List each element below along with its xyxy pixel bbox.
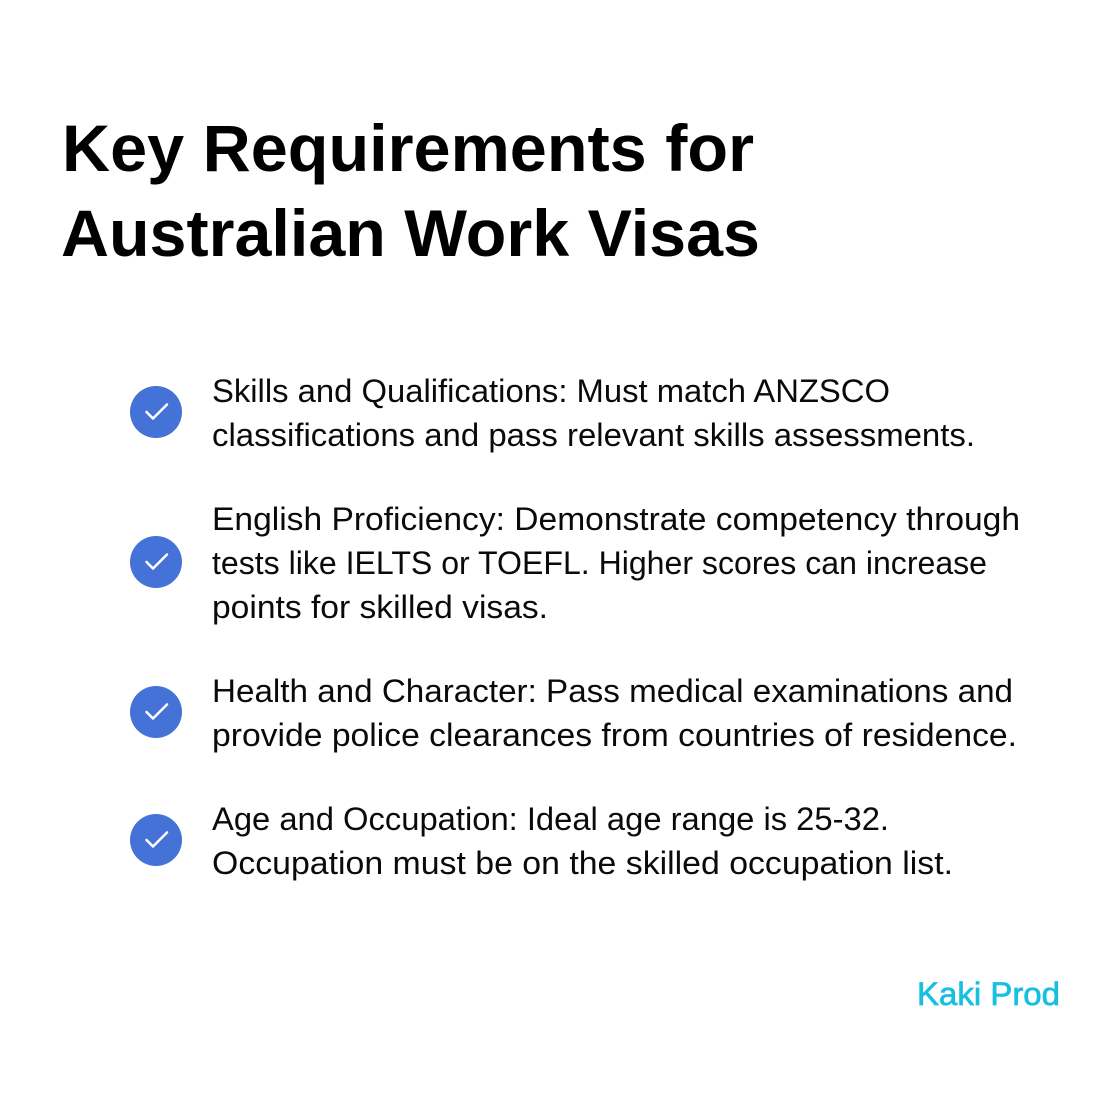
icon: check badge bbox=[130, 686, 182, 738]
title bbox=[61, 111, 760, 270]
icon: check badge bbox=[130, 386, 182, 438]
icon: check badge bbox=[130, 536, 182, 588]
requirement: age and occupation bbox=[130, 801, 953, 881]
text: english proficiency: English Proficiency: Demonstrate competency through bbox=[212, 501, 1020, 537]
requirement: health and character bbox=[130, 673, 1017, 753]
text: skills and qualifications: Skills and Qualifications: Must match ANZSCO bbox=[212, 373, 890, 409]
requirement: skills and qualifications bbox=[130, 373, 975, 453]
text: age and occupation: Occupation must be on the skilled occupation list. bbox=[212, 845, 953, 881]
text: english proficiency: tests like IELTS or TOEFL. Higher scores can increase bbox=[212, 545, 987, 581]
text: health and character bbox=[212, 673, 1017, 753]
text: age and occupation: Age and Occupation: Ideal age range is 25-32. bbox=[212, 801, 889, 837]
text: health and character: provide police clearances from countries of residence. bbox=[212, 717, 1017, 753]
logo: Kaki Prod: Kaki Prod bbox=[917, 976, 1060, 1012]
requirement: english proficiency bbox=[130, 501, 1020, 625]
text: english proficiency bbox=[212, 501, 1020, 625]
text: age and occupation bbox=[212, 801, 953, 881]
text: english proficiency: points for skilled visas. bbox=[212, 589, 548, 625]
title: Australian Work Visas bbox=[61, 196, 760, 270]
title: Key Requirements for bbox=[62, 111, 754, 185]
text: health and character: Health and Character: Pass medical examinations and bbox=[212, 673, 1013, 709]
icon: check badge bbox=[130, 814, 182, 866]
text: skills and qualifications bbox=[212, 373, 975, 453]
text: skills and qualifications: classifications and pass relevant skills assessments. bbox=[212, 417, 975, 453]
